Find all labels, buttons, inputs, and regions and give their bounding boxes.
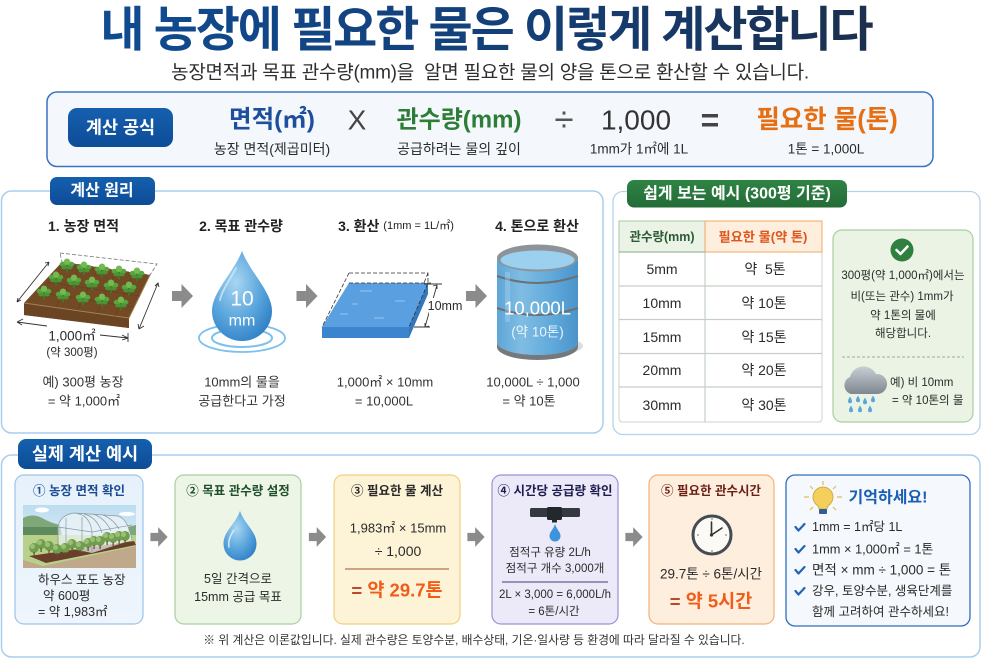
table: 필요한 물(약 톤) — [719, 230, 807, 244]
term: area: 면적(㎡) — [229, 104, 315, 134]
callout: rain equals water: 해당합니다. — [875, 327, 931, 340]
callout: rain equals water: 약 1톤의 물에 — [870, 308, 936, 322]
card 4: hourly supply: 점적구 유량 2L/h — [509, 546, 591, 559]
operator: equals: = — [701, 102, 719, 138]
icon: clock — [693, 516, 731, 554]
card 5: irrigation time: ⑤ 필요한 관수시간 — [661, 483, 761, 498]
icon: dripper — [530, 507, 580, 542]
arrow — [150, 527, 168, 547]
icon: water drop 10mm: mm — [229, 312, 255, 330]
card 5: irrigation time: 29.7톤 ÷ 6톤/시간 — [660, 566, 762, 582]
card 3: water needed: ③ 필요한 물 계산 — [351, 483, 443, 498]
table: 5mm — [646, 261, 678, 277]
term: area: 농장 면적(제곱미터) — [214, 141, 330, 157]
step 4 heading: 4. 톤으로 환산 — [495, 218, 579, 234]
icon: light bulb — [804, 481, 842, 514]
checklist: 면적 × mm ÷ 1,000 = 톤 — [812, 562, 951, 578]
table: 15mm — [643, 329, 681, 345]
operator: times: X — [348, 104, 367, 136]
panel: real calculation example — [2, 439, 980, 657]
callout: rain equals water — [833, 230, 973, 422]
card 4: hourly supply: 2L × 3,000 = 6,000L/h — [499, 589, 611, 601]
illustration: farm plot: (약 300평) — [46, 345, 98, 359]
illustration: water barrel: (약 10톤) — [511, 324, 564, 340]
title: 내 농장에 필요한 물은 이렇게 계산합니다 — [100, 4, 874, 56]
step 1 heading: 1. 농장 면적 — [48, 218, 119, 234]
card: remember: 기억하세요! — [849, 488, 927, 506]
arrow — [467, 527, 485, 547]
term: water needed: 필요한 물(톤) — [756, 106, 898, 134]
arrow — [309, 527, 326, 547]
card 2: target irrigation: ② 목표 관수량 설정 — [186, 484, 290, 498]
checklist: 1mm = 1㎡당 1L — [812, 520, 902, 534]
icon: drop — [224, 511, 256, 560]
card 2: target irrigation: 5일 간격으로 — [204, 572, 272, 586]
checklist: 1mm × 1,000㎡ = 1톤 — [812, 542, 934, 556]
term: water needed: 1톤 = 1,000L — [788, 142, 865, 156]
card 4: hourly supply — [492, 475, 618, 624]
card 3: water needed: 1,983㎡ × 15mm — [350, 520, 446, 536]
icon: water drop 10mm: 10 — [230, 288, 254, 310]
card 4: hourly supply: 점적구 개수 3,000개 — [506, 562, 604, 575]
step 1 text: = 약 1,000㎡ — [48, 394, 120, 408]
card 4: hourly supply: = 6톤/시간 — [528, 605, 580, 618]
checklist: 강우, 토양수분, 생육단계를 — [812, 584, 952, 598]
panel: easy example — [613, 180, 980, 434]
table: 약 30톤 — [741, 397, 787, 413]
illustration: water layer — [322, 273, 462, 338]
step 4 text: = 약 10톤 — [502, 394, 556, 408]
step 2 text: 공급한다고 가정 — [198, 394, 286, 408]
card 2: target irrigation: 15mm 공급 목표 — [194, 590, 282, 604]
step 4 text — [486, 374, 580, 408]
icon: check — [890, 238, 914, 262]
card 1: farm area: = 약 1,983㎡ — [38, 604, 108, 619]
illustration: greenhouse — [23, 505, 136, 568]
step 3 text: = 10,000L — [355, 394, 413, 408]
card 5: irrigation time — [649, 475, 774, 624]
formula badge — [68, 108, 173, 147]
card 5: irrigation time: = 약 5시간 — [670, 590, 752, 612]
card 3: water needed — [334, 475, 460, 624]
callout: rain equals water: = 약 10톤의 물 — [892, 393, 963, 407]
term: 1000: 1mm가 1㎡에 1L — [590, 142, 689, 156]
table: 약 10톤 — [741, 295, 787, 311]
callout: rain equals water: 예) 비 10mm — [890, 376, 953, 389]
arrow — [296, 284, 318, 308]
formula badge: 계산 공식 — [86, 118, 155, 138]
step 3 text: 1,000㎡ × 10mm — [337, 374, 433, 390]
table: 30mm — [643, 397, 681, 413]
card 1: farm area: 하우스 포도 농장 — [38, 573, 126, 587]
step 2 heading: 2. 목표 관수량 — [199, 218, 283, 234]
table: 약 15톤 — [741, 329, 787, 345]
operator: divide: ÷ — [554, 100, 574, 140]
term: 1000 — [590, 104, 689, 156]
callout: rain equals water: 비(또는 관수) 1mm가 — [850, 290, 954, 303]
table: 약 5톤 — [744, 261, 786, 277]
step 3 heading: 3. 환산 (1mm = 1L/㎡) — [338, 218, 454, 234]
table: 관수량(mm) — [629, 230, 695, 244]
step 2 text: 10mm의 물을 — [204, 374, 280, 390]
card 4: hourly supply: ④ 시간당 공급량 확인 — [498, 483, 612, 498]
checklist — [796, 520, 952, 619]
card 3: water needed: ÷ 1,000 — [375, 543, 422, 559]
card 3: water needed: = 약 29.7톤 — [351, 580, 443, 600]
illustration: farm plot — [17, 253, 159, 359]
card 1: farm area: 약 600평 — [43, 588, 90, 603]
subtitle: 농장면적과 목표 관수량(mm)을 알면 필요한 물의 양을 톤으로 환산할 수 있습니다. — [171, 62, 809, 84]
principle badge — [50, 177, 155, 205]
arrow — [625, 527, 643, 547]
icon: water drop 10mm — [199, 251, 285, 352]
table: 약 20톤 — [741, 362, 787, 378]
step 3 text — [337, 374, 433, 408]
table: 20mm — [643, 362, 681, 378]
term: area — [214, 104, 330, 157]
step 2 text — [198, 374, 286, 408]
illustration: water layer: 10mm — [428, 299, 462, 313]
example badge: 쉽게 보는 예시 (300평 기준) — [643, 184, 831, 202]
term: irrigation: 관수량(mm) — [397, 106, 521, 134]
term: water needed — [756, 106, 898, 156]
term: irrigation — [397, 106, 521, 157]
step 1 text — [42, 374, 124, 408]
example badge — [18, 439, 152, 469]
card 2: target irrigation — [175, 475, 301, 624]
icon: rain cloud — [844, 366, 887, 412]
panel: calculation principle — [2, 177, 603, 433]
footnote: ※ 위 계산은 이론값입니다. 실제 관수량은 토양수분, 배수상태, 기온·일사량 등 환경에 따라 달라질 수 있습니다. — [203, 633, 745, 647]
table — [619, 221, 822, 422]
term: 1000: 1,000 — [601, 104, 671, 136]
table: 10mm — [643, 295, 681, 311]
arrow — [172, 284, 193, 308]
card 1: farm area: ① 농장 면적 확인 — [33, 483, 125, 498]
arrow — [466, 284, 487, 308]
example badge: 실제 계산 예시 — [32, 444, 138, 464]
principle badge: 계산 원리 — [70, 182, 134, 200]
illustration: farm plot: 1,000㎡ — [48, 328, 96, 344]
step 1 text: 예) 300평 농장 — [42, 374, 124, 390]
illustration: water barrel — [497, 244, 583, 360]
card: remember — [786, 475, 970, 626]
term: irrigation: 공급하려는 물의 깊이 — [397, 141, 521, 157]
panel: formula — [47, 92, 933, 166]
step 4 text: 10,000L ÷ 1,000 — [486, 374, 580, 390]
illustration: water barrel: 10,000L — [504, 298, 571, 318]
callout: rain equals water: 300평(약 1,000㎡)에서는 — [841, 268, 965, 282]
card 1: farm area — [15, 475, 143, 624]
checklist: 함께 고려하여 관수하세요! — [812, 605, 949, 619]
example badge — [627, 180, 847, 208]
